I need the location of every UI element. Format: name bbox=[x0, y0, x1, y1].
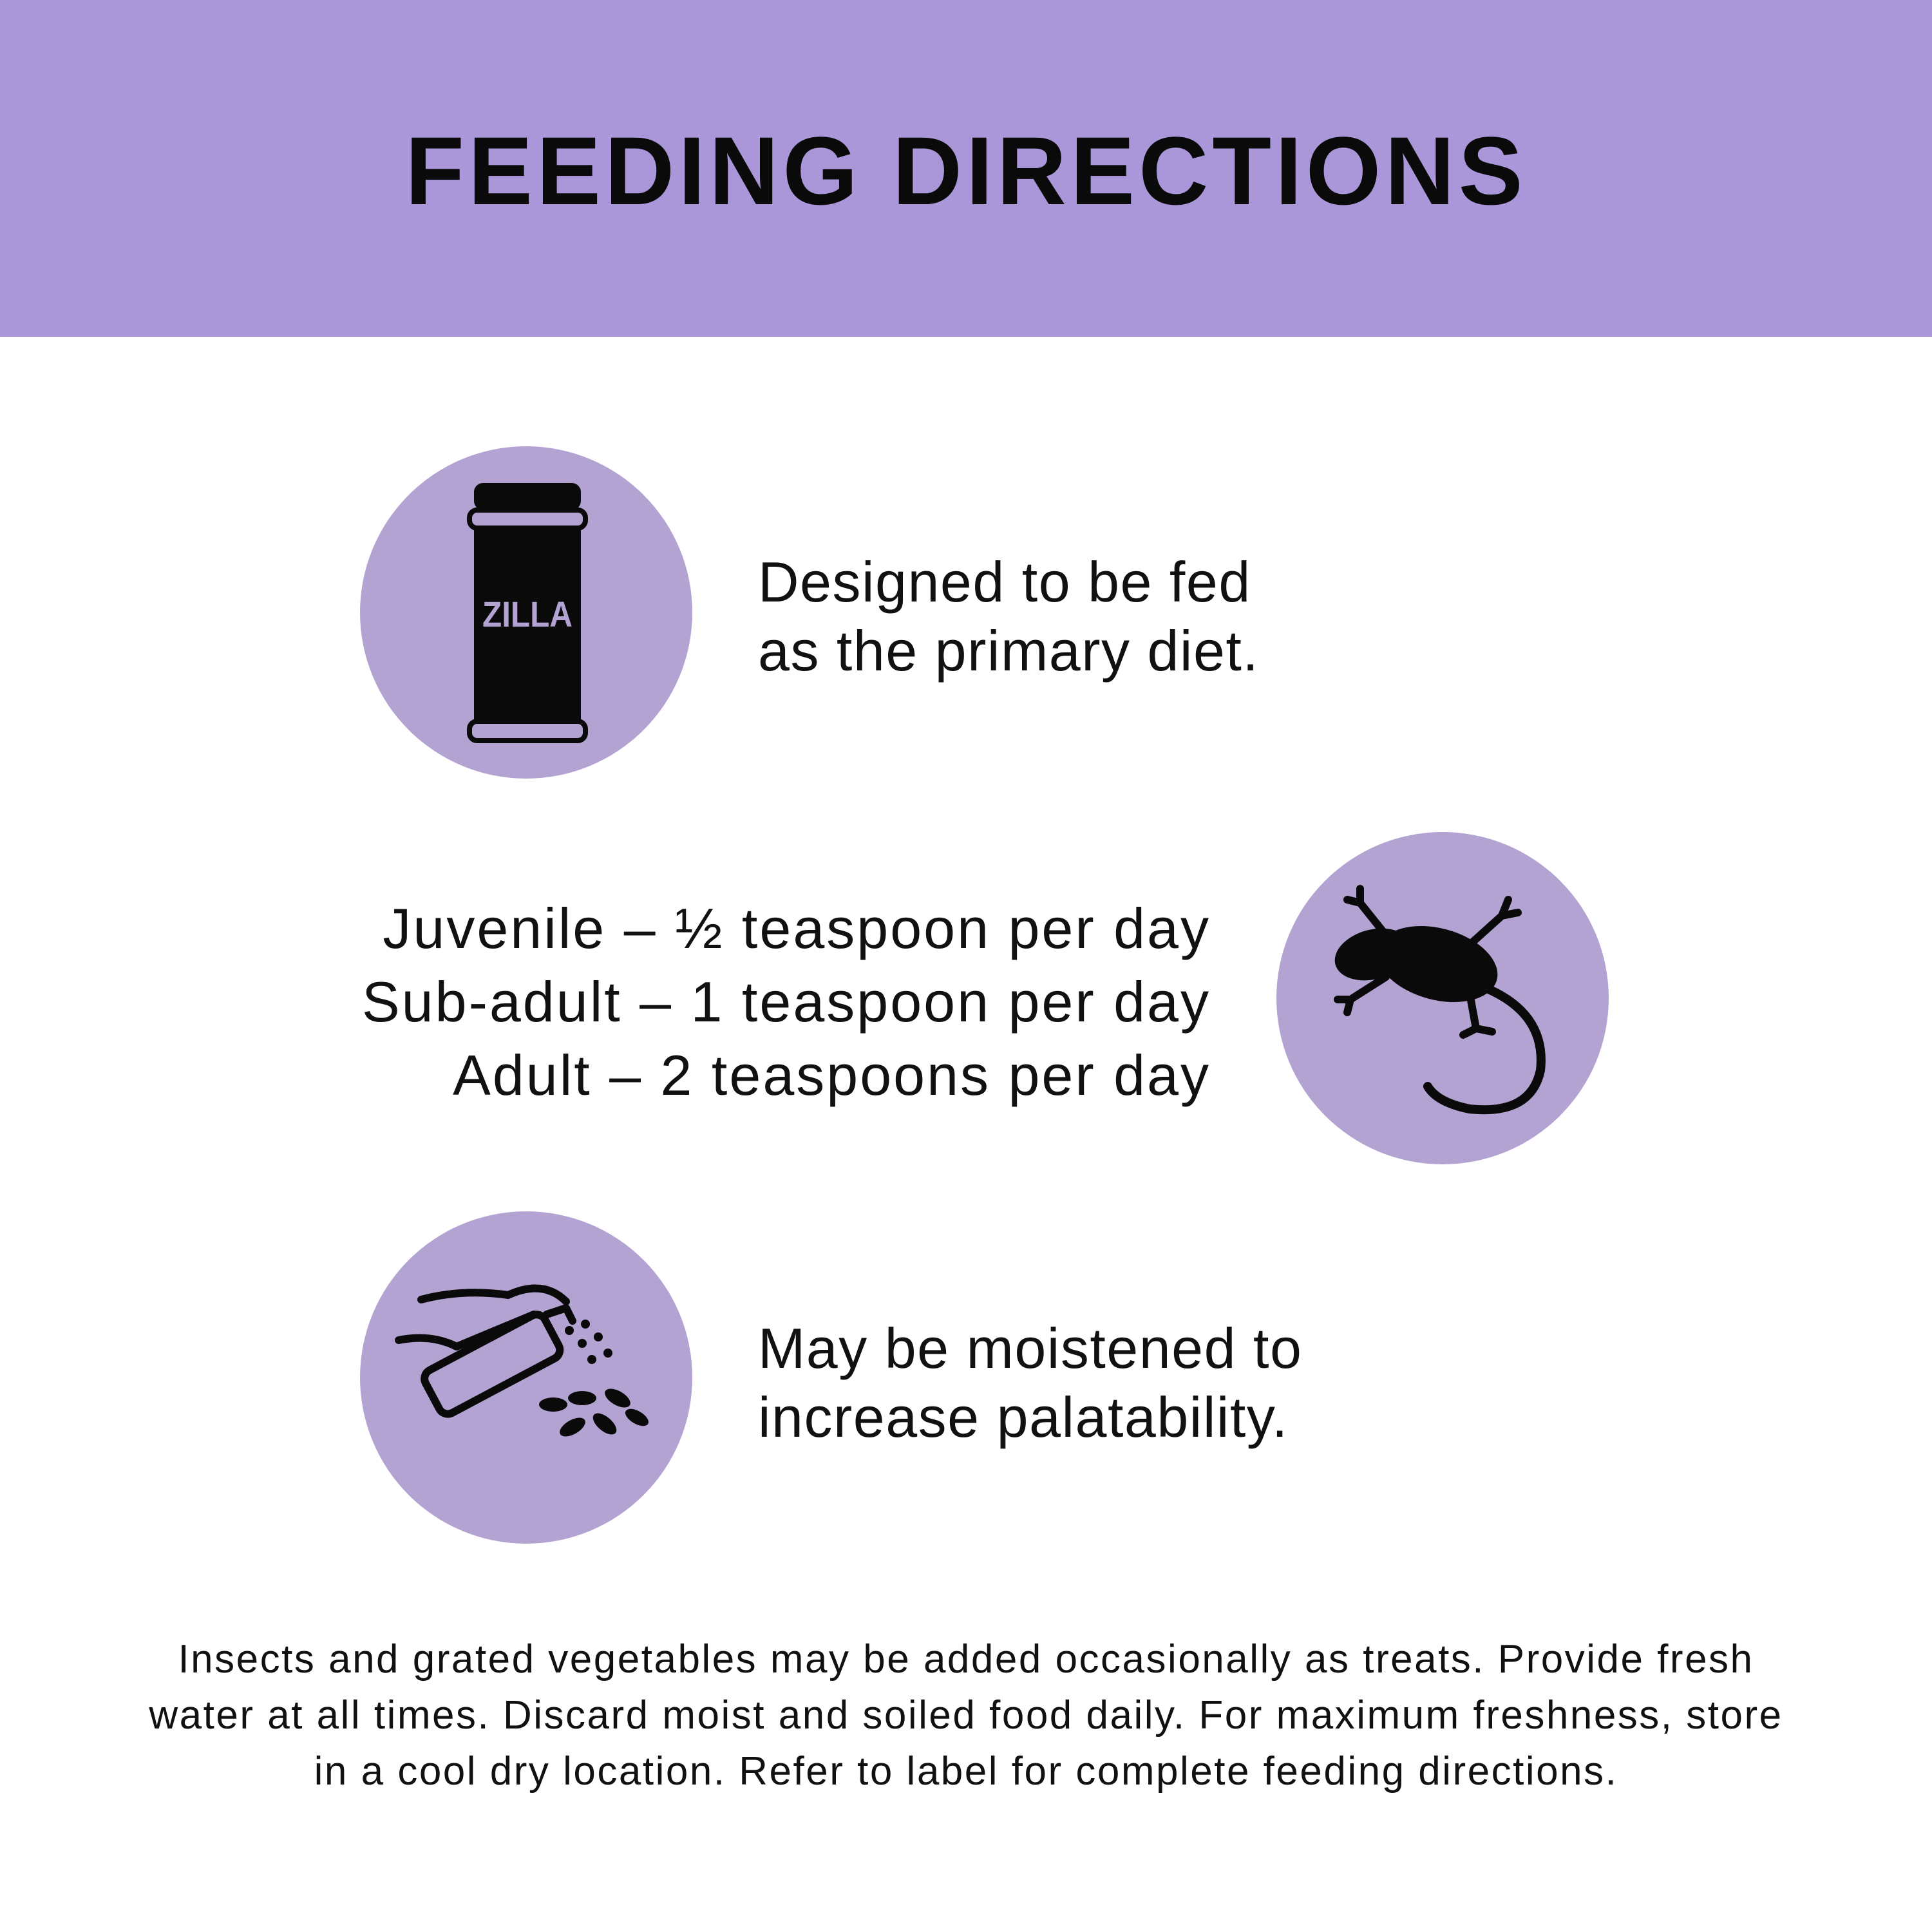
title: FEEDING DIRECTIONS bbox=[405, 117, 1527, 225]
text: moistened: May be moistened to bbox=[758, 1316, 1302, 1380]
icon: lizard bbox=[1276, 832, 1609, 1164]
icon: spray bottle bbox=[360, 1211, 692, 1544]
text: primary diet: Designed to be fed bbox=[758, 550, 1251, 614]
icon: supplement jar bbox=[360, 446, 692, 779]
text: primary diet bbox=[758, 550, 1259, 683]
footer text: in a cool dry location. Refer to label for complete feeding directions. bbox=[314, 1749, 1618, 1794]
text: amounts per day: Sub-adult – 1 teaspoon per day bbox=[362, 970, 1211, 1034]
text: amounts per day: Juvenile – ½ teaspoon per day bbox=[383, 896, 1211, 960]
header band bbox=[0, 0, 1932, 337]
text: primary diet: as the primary diet. bbox=[758, 619, 1259, 683]
text: moistened bbox=[758, 1316, 1302, 1449]
footer text bbox=[149, 1637, 1783, 1794]
footer text: water at all times. Discard moist and soiled food daily. For maximum freshness, store bbox=[149, 1693, 1783, 1738]
text: amounts per day bbox=[362, 896, 1211, 1107]
text: moistened: increase palatability. bbox=[758, 1385, 1289, 1449]
footer text: Insects and grated vegetables may be added occasionally as treats. Provide fresh bbox=[178, 1637, 1754, 1681]
icon: supplement jar: ZILLA bbox=[482, 594, 573, 634]
text: amounts per day: Adult – 2 teaspoons per day bbox=[453, 1043, 1211, 1107]
